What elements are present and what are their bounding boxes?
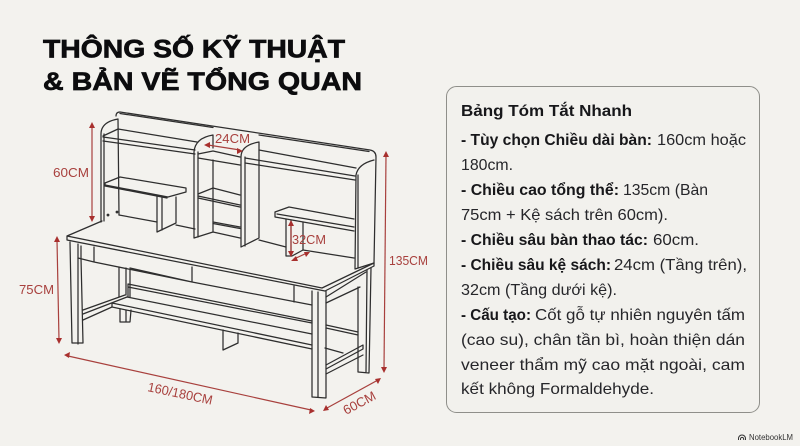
desk top and base — [67, 221, 374, 398]
spec: shelf depth: - Chiều sâu kệ sách: — [461, 257, 611, 274]
panel heading: Bảng Tóm Tắt Nhanh — [461, 101, 632, 120]
dimension: lower shelf depth 32CM: 32CM — [292, 232, 326, 247]
spec: construction: kết không Formaldehyde. — [461, 381, 654, 398]
dimension: desk length 160/180CM: 160/180CM — [146, 379, 214, 408]
dimension: top shelf depth 24CM: 24CM — [215, 131, 250, 146]
spec: construction: Cốt gỗ tự nhiên nguyên tấm — [535, 305, 745, 324]
spec: construction: (cao su), chân tần bì, hoàn thiện dán — [461, 332, 745, 349]
spec: overall height: 75cm + Kệ sách trên 60cm). — [461, 207, 668, 224]
spec: desk length: - Tùy chọn Chiều dài bàn: — [461, 132, 652, 149]
spec: construction — [461, 305, 745, 398]
dimension: desk height 75CM — [19, 236, 62, 344]
icon: NotebookLM mark — [738, 435, 746, 440]
footer: NotebookLM logo: NotebookLM — [749, 433, 793, 442]
dimension: top shelf depth 24CM — [204, 131, 250, 154]
panel: quick summary — [446, 86, 760, 412]
dimension: desk length 160/180CM — [64, 352, 315, 414]
spec: construction: - Cấu tạo: — [461, 307, 531, 324]
dimension: hutch height 60CM: 60CM — [53, 165, 89, 180]
spec: shelf depth: 32cm (Tầng dưới kệ). — [461, 282, 617, 299]
spec: desk depth: - Chiều sâu bàn thao tác: — [461, 232, 648, 249]
technical drawing: desk with hutch — [19, 112, 428, 418]
dimension: lower shelf depth 32CM — [288, 220, 326, 261]
spec: overall height: - Chiều cao tổng thể: — [461, 181, 619, 199]
title: & BẢN VẼ TỔNG QUAN — [43, 66, 362, 96]
dimension: hutch height 60CM — [53, 122, 95, 222]
spec: desk length: 160cm hoặc — [657, 132, 746, 149]
spec: shelf depth: 24cm (Tầng trên), — [614, 257, 747, 274]
dimension: desk height 75CM: 75CM — [19, 282, 54, 297]
spec: overall height — [461, 181, 708, 224]
hutch bookshelf — [101, 112, 376, 269]
spec: shelf depth — [461, 257, 747, 299]
dimension: desk depth 60CM: 60CM — [340, 388, 378, 418]
spec: construction: veneer thẩm mỹ cao mặt ngoài, cam — [461, 356, 745, 374]
spec: desk depth: 60cm. — [653, 232, 699, 249]
spec: desk length — [461, 132, 746, 174]
spec: desk length: 180cm. — [461, 157, 513, 174]
spec: overall height: 135cm (Bàn — [623, 182, 708, 199]
title: THÔNG SỐ KỸ THUẬT — [43, 34, 345, 64]
dimension: desk depth 60CM — [323, 378, 381, 418]
dimension: overall height 135CM: 135CM — [389, 253, 428, 268]
title — [43, 34, 362, 96]
dimension: overall height 135CM — [381, 151, 428, 373]
